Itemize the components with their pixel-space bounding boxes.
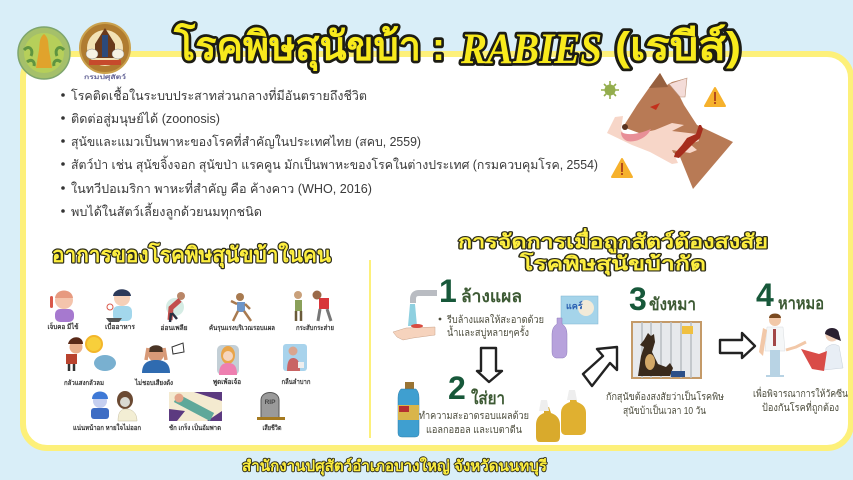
symptom: dislikes loud noise: ไม่ชอบเสียงดัง xyxy=(134,378,174,387)
divider xyxy=(369,260,371,438)
symptom: loss of appetite: เบื่ออาหาร xyxy=(105,321,135,331)
symptom: severe itching around the wound xyxy=(209,293,275,332)
icon: soap and liquid soap: แคร์ xyxy=(566,300,583,311)
symptom: delirious speech xyxy=(213,345,241,387)
heading: management after a suspected bite: การจัดการเมื่อถูกสัตว์ต้องสงสัย xyxy=(458,228,768,254)
logo: provincial livestock seal xyxy=(18,27,70,79)
symptom: seizures and paralysis xyxy=(169,392,222,432)
step 2: apply medicine: 2 xyxy=(448,370,466,406)
title xyxy=(173,23,741,73)
symptom: chest tightness and breathlessness xyxy=(73,391,141,432)
bullet list: disease facts: พบได้ในสัตว์เลี้ยงลูกด้วยนมทุกชนิด xyxy=(71,202,262,220)
heading: symptoms in humans: อาการของโรคพิษสุนัขบ้าในคน xyxy=(52,242,332,269)
symptom: restlessness xyxy=(294,290,334,332)
step 4: see a doctor: หาหมอ xyxy=(778,294,824,313)
symptom: fear of light and wind xyxy=(64,336,116,387)
icon: soap and liquid soap xyxy=(552,296,598,358)
step 1: wash the wound: ล้างแผล xyxy=(461,287,522,306)
step 3 caption: สุนัขบ้าเป็นเวลา 10 วัน xyxy=(623,403,706,417)
bullet list: disease facts: ในทวีปอเมริกา พาหะที่สำคัญ คือ ค้างคาว (WHO, 2016) xyxy=(71,180,372,196)
step 2: apply medicine: ใส่ยา xyxy=(471,388,505,408)
symptom: sore throat and fever: เจ็บคอ มีไข้ xyxy=(48,322,79,331)
symptom: difficulty swallowing xyxy=(282,344,310,386)
icon: warning bottom xyxy=(612,159,632,177)
step 1: wash the wound xyxy=(439,273,544,339)
title: : xyxy=(432,25,445,69)
symptom: seizures and paralysis: ชัก เกร็ง เป็นอัมพาต xyxy=(169,423,221,432)
footer: office name: สำนักงานปศุสัตว์อำเภอบางใหญ่ จังหวัดนนทบุรี xyxy=(242,457,548,476)
illustration: rabid dog biting a hand xyxy=(607,73,733,189)
step 4: see a doctor: 4 xyxy=(756,277,774,313)
icon: tap washing a wounded hand xyxy=(393,293,437,340)
step 3: confine the dog: ขังหมา xyxy=(649,295,696,314)
icon: betadine bottles xyxy=(536,390,586,442)
step 1: wash the wound: 1 xyxy=(439,273,457,309)
icon: alcohol bottle xyxy=(398,382,419,437)
symptom: delirious speech: พูดเพ้อเจ้อ xyxy=(213,377,241,387)
heading: management after a suspected bite: โรคพิษสุนัขบ้ากัด xyxy=(519,252,706,276)
step 3: confine the dog: 3 xyxy=(629,281,647,317)
symptom: severe itching around the wound: คันรุนแรงบริเวณรอบแผล xyxy=(209,324,275,332)
step 4 caption xyxy=(753,386,848,414)
step 1: wash the wound: รีบล้างแผลให้สะอาดด้วย xyxy=(446,314,544,326)
heading: management after a suspected bite xyxy=(458,228,768,276)
icon: warning top xyxy=(705,88,725,106)
symptom: fatigue xyxy=(160,292,188,332)
arrow: step 1 to step 2 xyxy=(477,348,502,382)
bullet list: disease facts: สัตว์ป่า เช่น สุนัขจิ้งจอก สุนัขป่า แรคคูน มักเป็นพาหะของโรคในต่างประเทศ (กรมควบคุมโรค, 2554) xyxy=(71,155,598,173)
title: โรคพิษสุนัขบ้า xyxy=(173,23,421,72)
symptom: death (tombstone): RIP xyxy=(265,399,276,406)
symptom: loss of appetite xyxy=(105,289,135,331)
symptom: restlessness: กระสับกระส่าย xyxy=(296,324,334,332)
step 2: apply medicine: แอลกอฮอล และเบตาดีน xyxy=(426,424,522,436)
symptom: fear of light and wind: กลัวแสงกลัวลม xyxy=(64,379,104,387)
title: RABIES xyxy=(460,26,602,73)
arrow: step 3 to step 4 xyxy=(720,333,755,358)
arrow: step 2 toward step 3 xyxy=(583,347,617,386)
symptom: death (tombstone) xyxy=(257,392,285,432)
bullet list: disease facts: สุนัขและแมวเป็นพาหะของโรคที่สำคัญในประเทศไทย (สคบ, 2559) xyxy=(71,133,421,150)
panel: main content card xyxy=(23,54,851,448)
step 1: wash the wound: น้ำและสบู่หลายๆครั้ง xyxy=(447,325,529,339)
symptom: chest tightness and breathlessness: แน่นหน้าอก หายใจไม่ออก xyxy=(73,423,141,432)
step 2: apply medicine xyxy=(419,370,529,436)
step 2: apply medicine: ทำความสะอาดรอบแผลด้วย xyxy=(419,410,529,422)
symptom: difficulty swallowing: กลืนลำบาก xyxy=(282,378,310,386)
step 4: see a doctor xyxy=(756,277,824,313)
symptom: death (tombstone): เสียชีวิต xyxy=(262,424,282,432)
bullet list: disease facts xyxy=(61,86,598,220)
step 3: confine the dog xyxy=(629,281,696,317)
logo: Department of Livestock seal xyxy=(80,23,130,73)
title: (เรบีส์) xyxy=(615,24,741,69)
step 4 caption: ป้องกันโรคที่ถูกต้อง xyxy=(762,400,839,414)
step 3 caption: กักสุนัขต้องสงสัยว่าเป็นโรคพิษ xyxy=(606,389,724,403)
icon: virus xyxy=(601,81,619,99)
bullet list: disease facts: ติดต่อสู่มนุษย์ได้ (zoonosis) xyxy=(71,112,220,127)
icon: doctor and patient xyxy=(759,314,843,377)
icon: dog in a cage xyxy=(632,322,701,378)
symptom: sore throat and fever xyxy=(48,290,79,331)
symptom: dislikes loud noise xyxy=(134,343,184,387)
bullet list: disease facts: โรคติดเชื้อในระบบประสาทส่วนกลางที่มีอันตรายถึงชีวิต xyxy=(71,86,367,103)
step 3 caption xyxy=(606,389,724,417)
symptom: fatigue: อ่อนเพลีย xyxy=(160,324,188,332)
logo caption: กรมปศุสัตว์ xyxy=(84,73,127,81)
